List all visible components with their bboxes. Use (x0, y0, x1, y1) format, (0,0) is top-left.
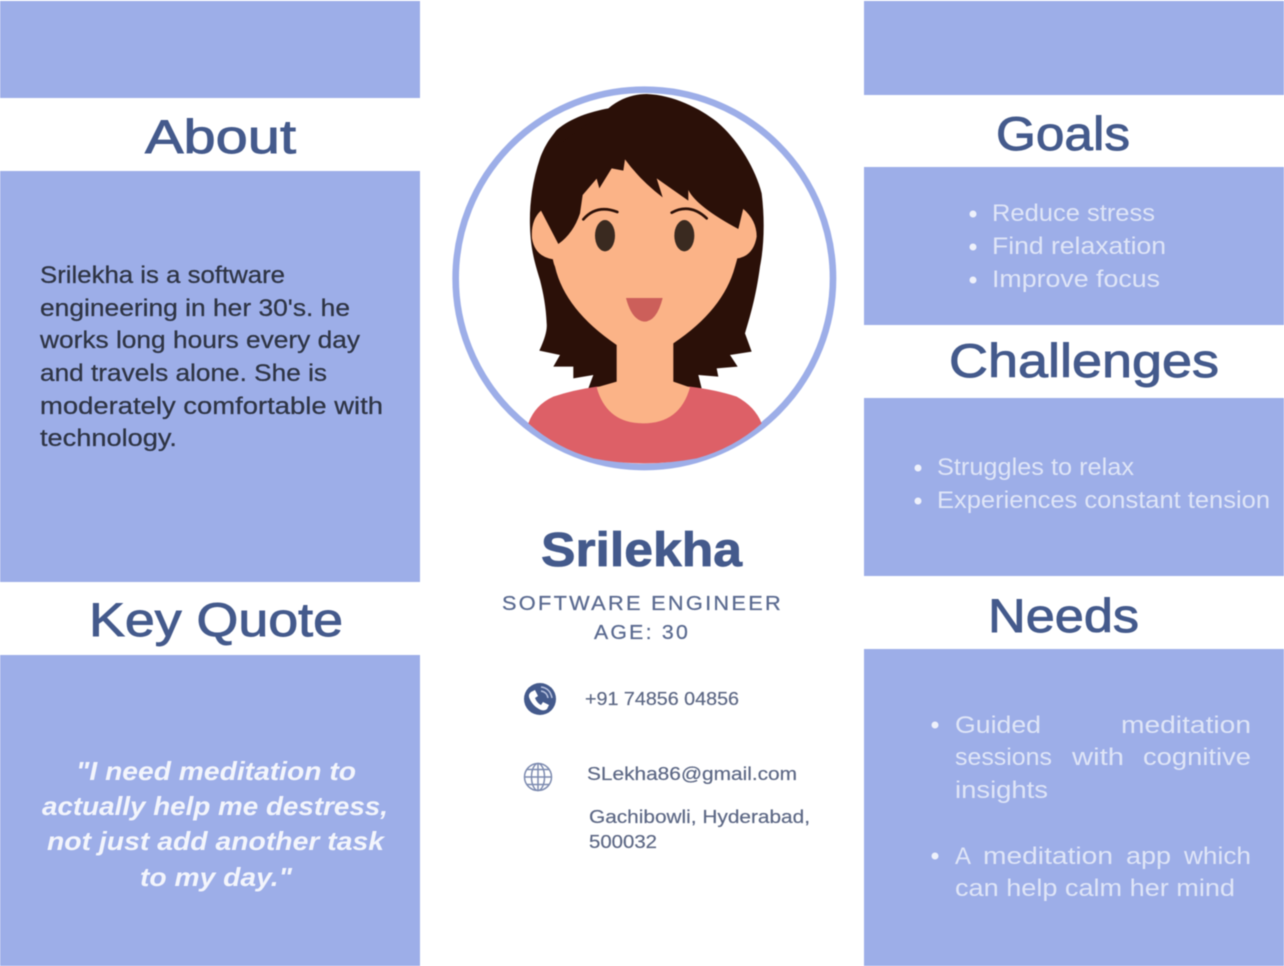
panel: about (0, 171, 420, 582)
icon: phone (524, 683, 556, 715)
about text: Srilekha is a software (40, 262, 285, 289)
needs list: Guided (955, 712, 1041, 739)
shirt (528, 387, 762, 463)
needs list: app (1126, 843, 1171, 870)
address: Gachibowli, Hyderabad, (589, 806, 810, 827)
portrait: avatar in circle (456, 90, 833, 467)
panel: challenges (864, 398, 1284, 576)
about text: works long hours every day (39, 327, 360, 354)
eyebrows (583, 209, 707, 219)
needs list: meditation (983, 843, 1113, 870)
needs list (932, 712, 1251, 902)
goals list: Improve focus (992, 266, 1160, 293)
needs list: cognitive (1143, 744, 1251, 771)
goals list: Reduce stress (992, 200, 1155, 227)
panel: key quote (0, 655, 420, 966)
panel: top left band (0, 1, 420, 98)
quote text: "I need meditation to (76, 756, 356, 786)
goals list: Find relaxation (992, 233, 1166, 260)
challenges list: Experiences constant tension (937, 487, 1270, 514)
ears (532, 208, 757, 259)
neck (597, 327, 690, 423)
quote text: actually help me destress, (42, 791, 388, 821)
needs list: insights (955, 777, 1048, 804)
about text (39, 262, 383, 452)
phone number: +91 74856 04856 (585, 688, 739, 709)
challenges list (914, 454, 1270, 514)
quote text: to my day." (140, 862, 293, 892)
about text: technology. (40, 425, 177, 452)
heading: Key Quote: Key Quote (89, 593, 343, 646)
address: 500032 (589, 831, 657, 852)
job title: SOFTWARE ENGINEER (502, 593, 783, 615)
quote text: not just add another task (47, 826, 386, 856)
heading: About: About (145, 110, 296, 163)
about text: moderately comfortable with (40, 393, 383, 420)
needs list: meditation (1121, 712, 1251, 739)
panel: top right band (864, 1, 1284, 95)
about text: engineering in her 30's. he (40, 295, 350, 322)
hair back (530, 94, 764, 388)
face (551, 147, 740, 345)
fringe (541, 110, 750, 244)
email: SLekha86@gmail.com (587, 763, 797, 784)
needs list: A (955, 843, 971, 870)
needs list: with (1071, 744, 1124, 771)
panel: goals (864, 167, 1284, 325)
age: AGE: 30 (594, 622, 690, 644)
quote text (42, 756, 388, 892)
challenges list: Struggles to relax (937, 454, 1134, 481)
mouth (626, 298, 663, 322)
name: Srilekha (541, 524, 742, 577)
needs list: sessions (955, 744, 1052, 771)
heading: Goals: Goals (996, 107, 1130, 160)
needs list: which (1183, 843, 1251, 870)
needs list: can help calm her mind (955, 875, 1235, 902)
heading: Needs: Needs (988, 589, 1139, 642)
heading: Challenges: Challenges (949, 334, 1219, 387)
goals list (970, 200, 1166, 293)
address (589, 806, 810, 852)
about text: and travels alone. She is (40, 360, 327, 387)
eyes (595, 220, 615, 251)
panel: needs (864, 649, 1284, 966)
icon: globe (524, 764, 552, 790)
